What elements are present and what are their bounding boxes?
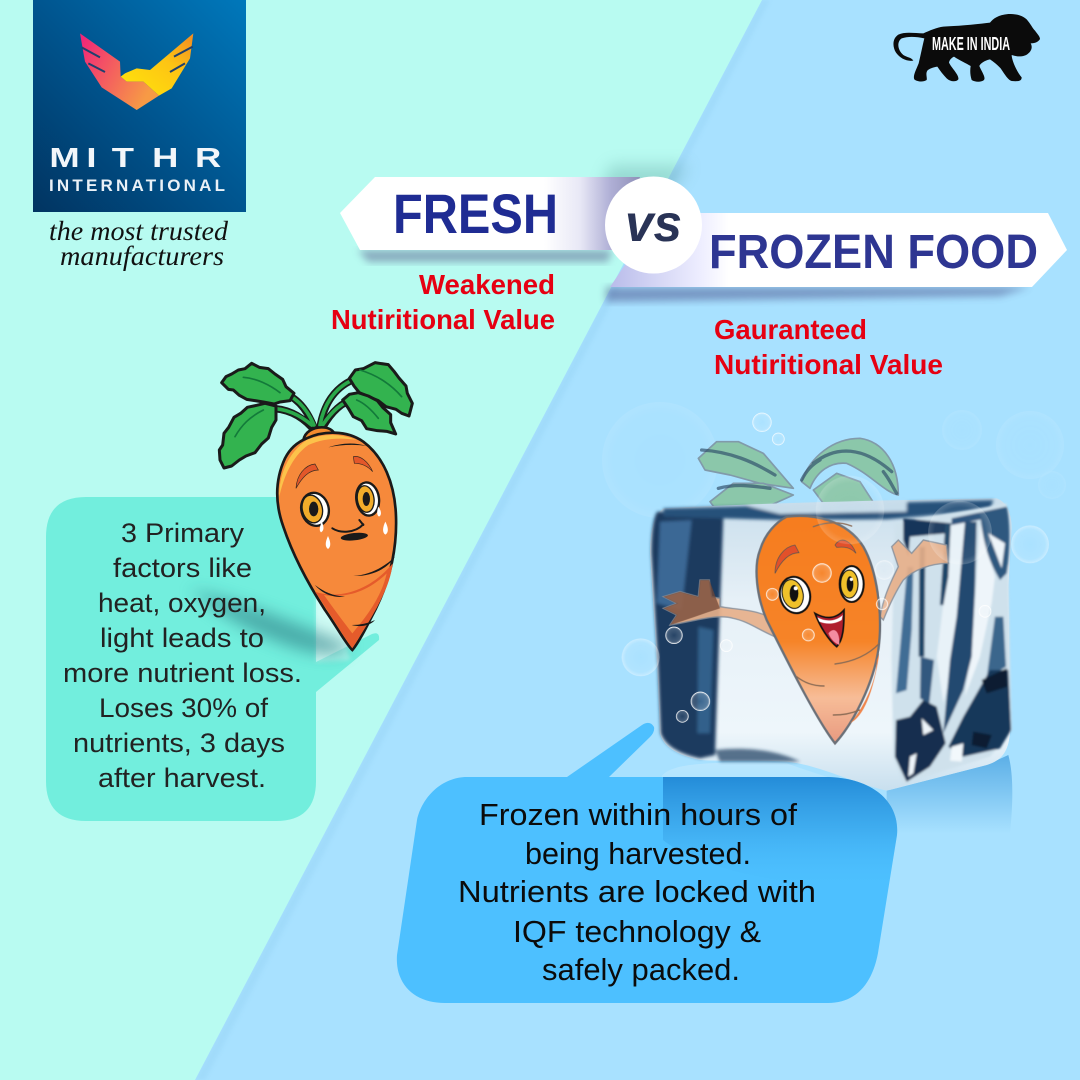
badge: vs (605, 176, 702, 274)
callout text: light leads to (100, 623, 264, 653)
callout text (458, 797, 816, 987)
illustration: frozen carrot in ice cube (622, 413, 1049, 833)
carrot tears (320, 507, 388, 549)
heading: Frozen Food: FROZEN FOOD (709, 226, 1038, 279)
frozen carrot eyebrows (775, 545, 799, 573)
logo: Mithr International (33, 0, 246, 212)
shadow of the ice cube on callout (663, 777, 897, 890)
subheading: guaranteed nutritional value: Nutiritional Value (714, 349, 943, 380)
callout text: being harvested. (525, 836, 751, 871)
frozen leaves (698, 438, 898, 515)
ice right face streaks (892, 503, 1012, 783)
carrot nose and mouth (332, 520, 363, 532)
heading: Fresh: FRESH (393, 182, 558, 245)
callout text: heat, oxygen, (98, 588, 266, 618)
ice cube body (650, 498, 1012, 791)
background: left mint panel (0, 0, 762, 1080)
callout text: safely packed. (542, 952, 740, 987)
faint background bubbles (602, 402, 1066, 518)
lion label: MAKE IN INDIA (932, 34, 1010, 54)
banner: Fresh (340, 165, 690, 262)
carrot leaves (219, 363, 412, 468)
subheading: guaranteed nutritional value (714, 314, 943, 380)
callout: fresh carrot facts (46, 497, 379, 821)
subheading: weakened nutritional value: Weakened (419, 269, 555, 300)
subheading: weakened nutritional value: Nutiritional Value (331, 304, 555, 335)
icon: winged emblem (80, 33, 193, 110)
tagline (49, 216, 229, 271)
badge: vs: vs (625, 195, 682, 253)
carrot eyes (298, 481, 381, 529)
callout text: Nutrients are locked with (458, 874, 816, 909)
callout text (63, 518, 302, 793)
logo subtitle: INTERNATIONAL (49, 176, 225, 195)
frozen carrot wrinkles (797, 523, 879, 715)
carrot body (277, 433, 396, 650)
logo wordmark: MITHR (49, 142, 221, 173)
subheading: guaranteed nutritional value: Gauranteed (714, 314, 867, 345)
illustration: crying fresh carrot (219, 363, 412, 650)
banner: Frozen Food (606, 213, 1067, 302)
callout text: 3 Primary (121, 518, 245, 548)
callout text: after harvest. (98, 763, 266, 793)
callout: frozen food facts (397, 723, 897, 1003)
frozen carrot mouth (815, 610, 844, 647)
carrot eyebrows (296, 464, 318, 488)
carrot stems (268, 378, 357, 427)
tagline: manufacturers (60, 241, 224, 271)
frozen carrot eyes (776, 566, 864, 616)
ice reflection (662, 763, 873, 800)
carrot lower shading (315, 563, 393, 648)
callout text: Loses 30% of (99, 693, 269, 723)
ice left face and top edge (651, 500, 993, 762)
callout text: factors like (113, 553, 252, 583)
frozen carrot arms (663, 540, 948, 640)
callout text: more nutrient loss. (63, 658, 302, 688)
diagonal shadow on the split (195, 0, 770, 1080)
frozen carrot body (757, 516, 880, 743)
carrot rim highlight (279, 435, 357, 497)
subheading: weakened nutritional value (331, 269, 555, 335)
callout text: IQF technology & (513, 914, 761, 949)
icon: Make in India lion (893, 14, 1040, 82)
carrot wrinkles (315, 443, 395, 626)
ice highlight bubbles (622, 413, 1049, 722)
callout text: nutrients, 3 days (73, 728, 285, 758)
tagline: the most trusted (49, 216, 229, 246)
carrot crown (303, 427, 335, 440)
callout text: Frozen within hours of (479, 797, 797, 832)
